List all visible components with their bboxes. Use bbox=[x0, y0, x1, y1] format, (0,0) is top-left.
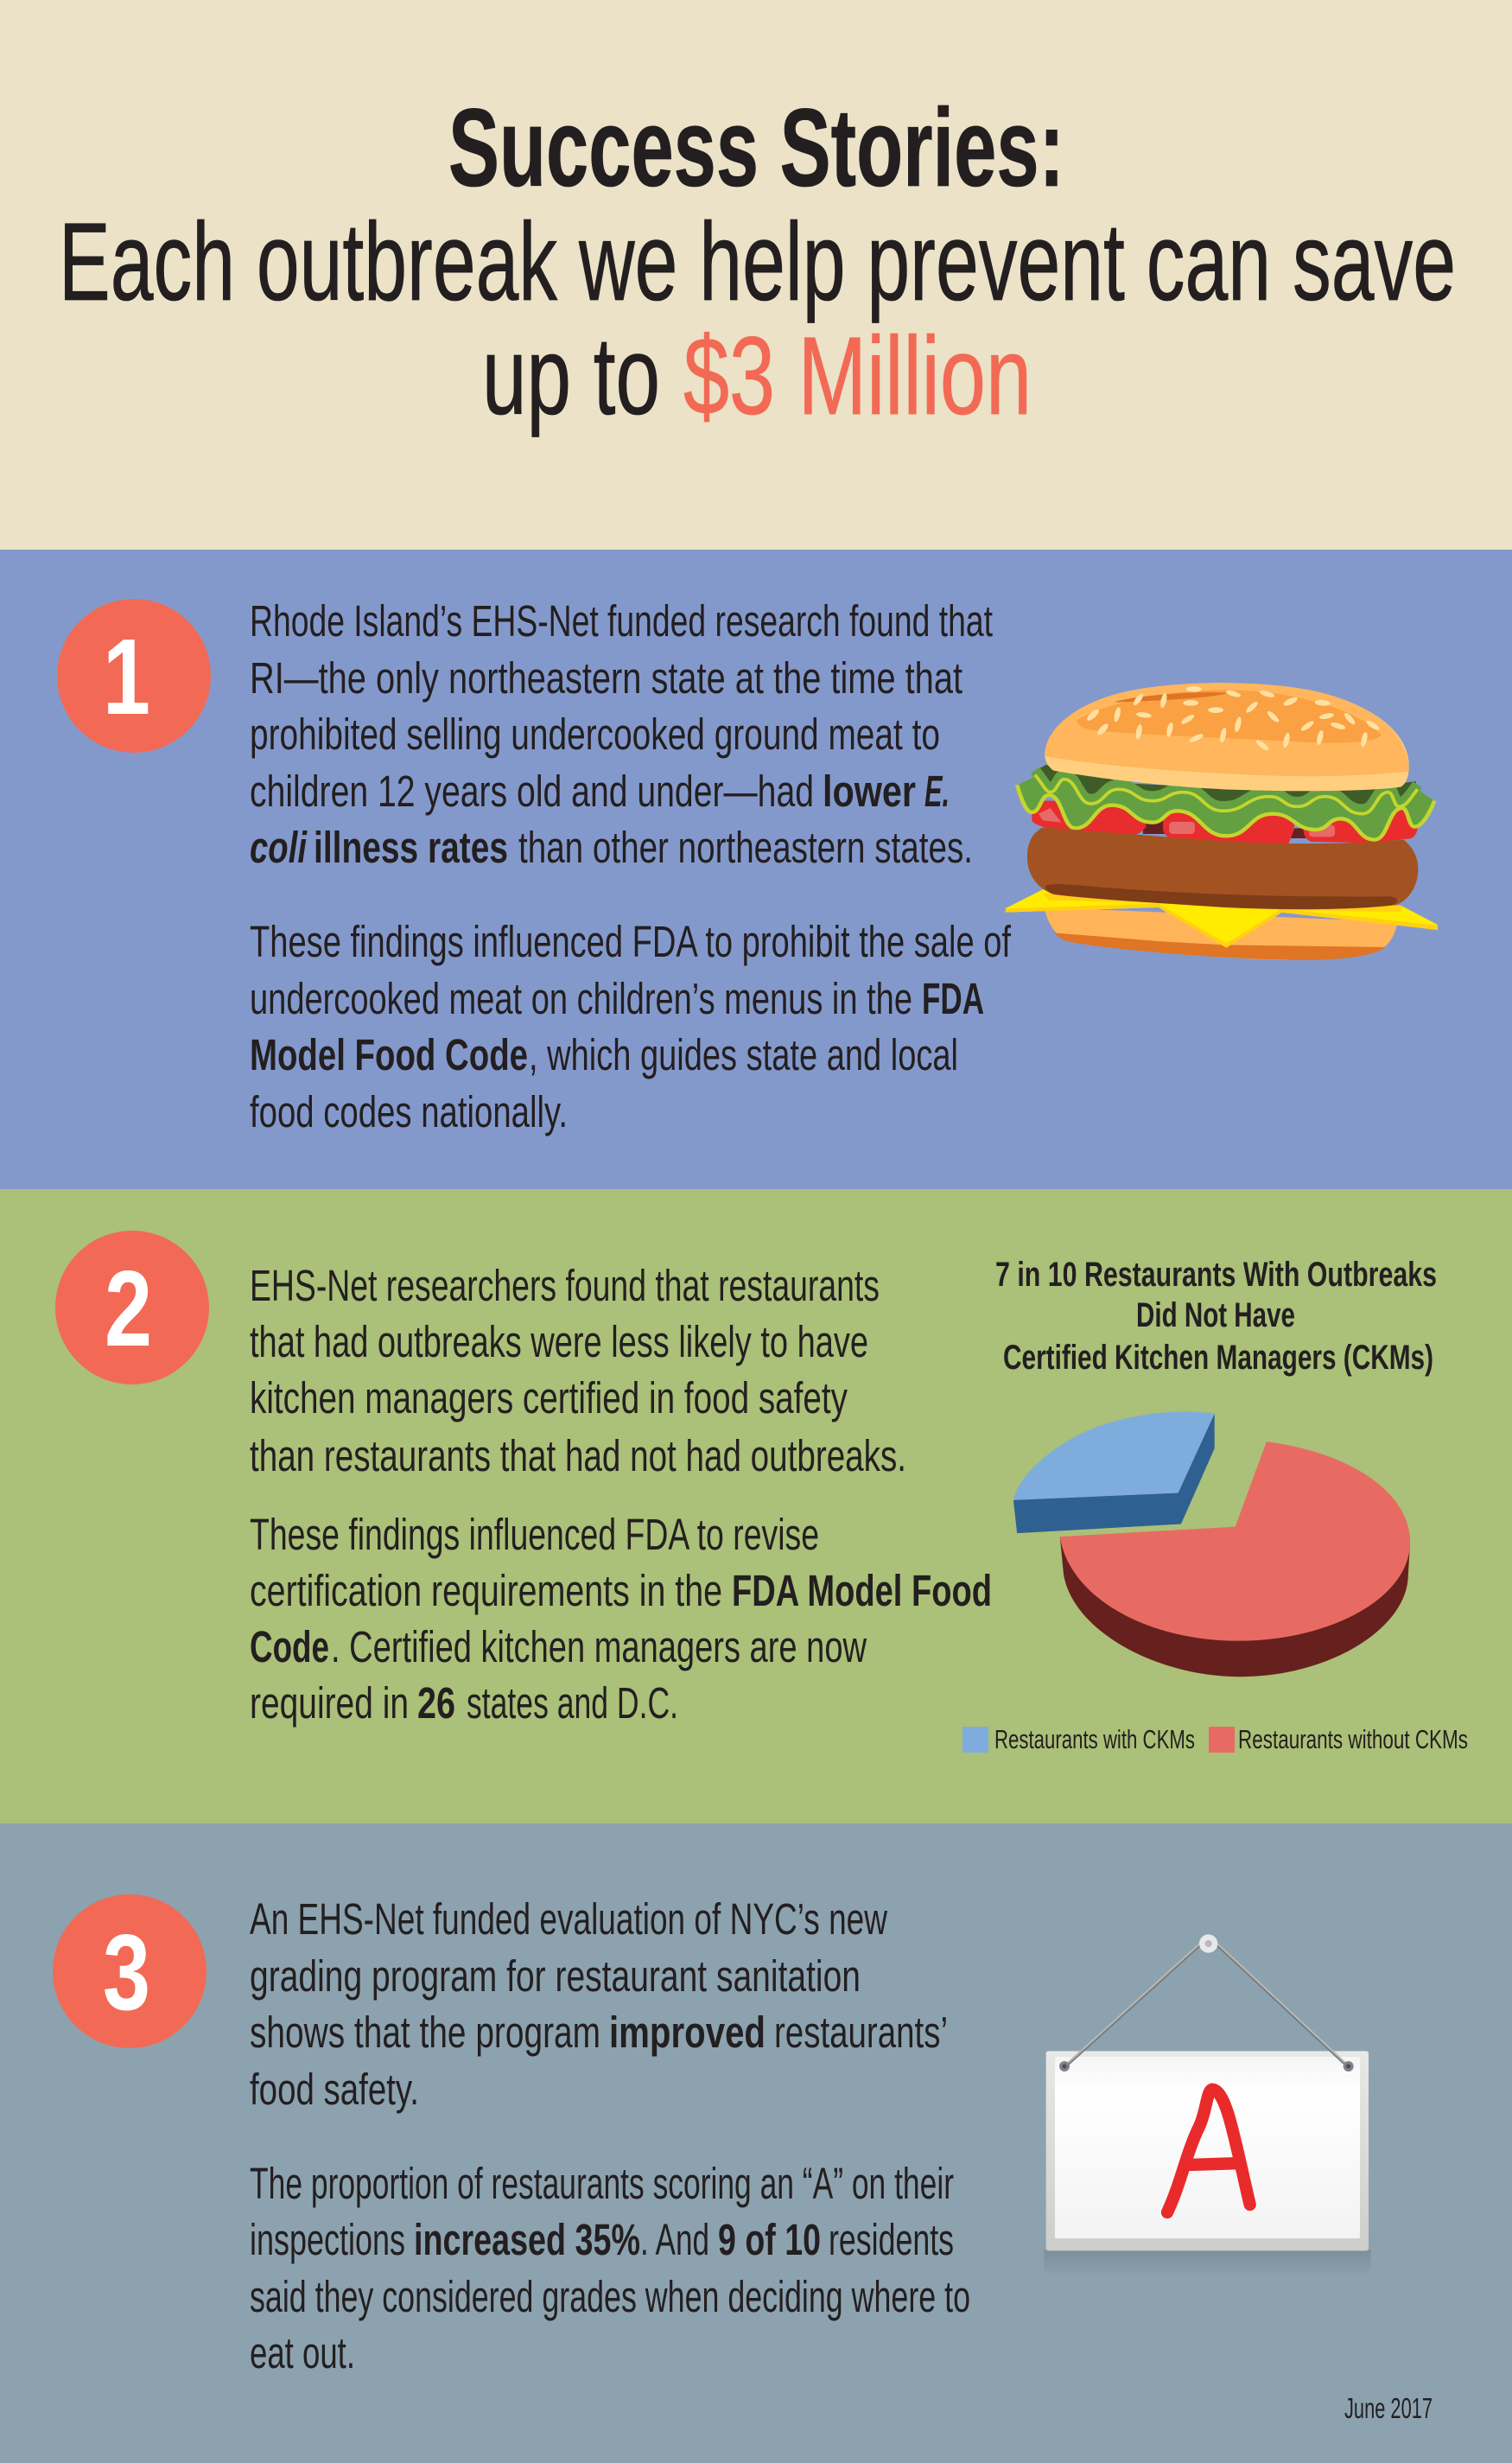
text block: story 3 second paragraph: eat out. bbox=[250, 2328, 355, 2377]
text block: story 2 second paragraph: 26 bbox=[417, 1678, 455, 1728]
text block: story 1 first paragraph: lower bbox=[823, 767, 916, 816]
title: $3 Million bbox=[683, 315, 1032, 438]
panel: header background bbox=[0, 0, 1512, 550]
date: June 2017 bbox=[1344, 2392, 1433, 2424]
patty bbox=[1027, 827, 1418, 909]
title: up to bbox=[482, 315, 660, 438]
text block: story 2 second paragraph: FDA Model Food bbox=[732, 1566, 992, 1615]
text block: story 3 second paragraph: 9 of 10 bbox=[718, 2215, 821, 2264]
text block: story 1 second paragraph: undercooked meat on children’s menus in the bbox=[250, 974, 912, 1023]
cheese bbox=[1006, 889, 1438, 948]
text block: story 1 second paragraph: food codes nationally. bbox=[250, 1087, 568, 1136]
text block: story 3 second paragraph bbox=[250, 2159, 970, 2377]
text block: story 1 first paragraph: than other northeastern states. bbox=[518, 823, 973, 872]
text block: story 3 second paragraph: inspections bbox=[250, 2215, 405, 2264]
text block: story 1 first paragraph: RI—the only northeastern state at the time that bbox=[250, 653, 962, 703]
dark lettuce back bbox=[1036, 765, 1416, 806]
text block: story 2 first paragraph: kitchen managers certified in food safety bbox=[250, 1373, 848, 1422]
text block: story 2 first paragraph: that had outbreaks were less likely to have bbox=[250, 1317, 868, 1366]
text block: story 3 first paragraph: shows that the program bbox=[250, 2008, 600, 2057]
text block: story 1 first paragraph: coli bbox=[250, 823, 308, 872]
text block: story 2 first paragraph: than restaurants that had not had outbreaks. bbox=[250, 1431, 906, 1480]
number badge 3: 3 bbox=[103, 1913, 150, 2033]
text block: story 1 first paragraph: E. bbox=[924, 767, 950, 816]
text block: story 2 second paragraph: required in bbox=[250, 1678, 409, 1728]
text block: story 1 first paragraph bbox=[250, 596, 993, 872]
text block: story 2 second paragraph: These findings influenced FDA to revise bbox=[250, 1510, 819, 1559]
chart legend bbox=[962, 1724, 1468, 1754]
text block: story 2 second paragraph bbox=[250, 1510, 992, 1728]
pie chart bbox=[1013, 1411, 1410, 1677]
top bun bbox=[1045, 683, 1409, 791]
text block: story 3 second paragraph: increased 35% bbox=[414, 2215, 640, 2264]
number badge 2: 2 bbox=[105, 1250, 152, 1369]
chart legend: Restaurants with CKMs bbox=[994, 1724, 1195, 1754]
text block: story 1 second paragraph: These findings influenced FDA to prohibit the sale of bbox=[250, 917, 1012, 966]
tomato filling bbox=[1143, 821, 1306, 838]
text block: story 1 second paragraph: , which guides state and local bbox=[529, 1030, 958, 1079]
number badge 1 bbox=[57, 599, 211, 753]
number badge 3 bbox=[53, 1894, 206, 2048]
icon: hamburger bbox=[1006, 683, 1438, 960]
number badge 1: 1 bbox=[103, 618, 150, 737]
letter A mark bbox=[1167, 2090, 1250, 2212]
slice: restaurants without CKMs bbox=[1060, 1442, 1410, 1677]
text block: story 1 second paragraph bbox=[250, 917, 1012, 1136]
text block: story 3 second paragraph: residents bbox=[829, 2215, 954, 2264]
text block: story 3 second paragraph: The proportion of restaurants scoring an “A” on their bbox=[250, 2159, 954, 2208]
lettuce bbox=[1035, 770, 1418, 809]
text block: story 2 first paragraph bbox=[250, 1261, 906, 1480]
panel: story 2 background bbox=[0, 1189, 1512, 1823]
text block: story 1 first paragraph: prohibited selling undercooked ground meat to bbox=[250, 710, 940, 759]
text block: story 1 first paragraph: Rhode Island’s EHS-Net funded research found that bbox=[250, 596, 993, 646]
chart title bbox=[995, 1256, 1437, 1377]
text block: story 2 second paragraph: certification requirements in the bbox=[250, 1566, 722, 1615]
title bbox=[59, 86, 1456, 438]
text block: story 2 first paragraph: EHS-Net researchers found that restaurants bbox=[250, 1261, 880, 1310]
chart title: Did Not Have bbox=[1136, 1296, 1295, 1334]
title: Success Stories: bbox=[448, 86, 1064, 210]
panel: story 3 background bbox=[0, 1823, 1512, 2463]
number badge 2 bbox=[55, 1231, 209, 1384]
text block: story 3 first paragraph: food safety. bbox=[250, 2065, 419, 2114]
text block: story 3 first paragraph: restaurants’ bbox=[774, 2008, 948, 2057]
text block: story 3 first paragraph: improved bbox=[609, 2008, 766, 2057]
panel: story 1 background bbox=[0, 550, 1512, 1189]
text block: story 3 first paragraph bbox=[250, 1894, 948, 2114]
icon: hanging grade sign bbox=[1044, 1934, 1371, 2277]
text block: story 1 first paragraph: illness rates bbox=[314, 823, 508, 872]
text block: story 2 second paragraph: . Certified kitchen managers are now bbox=[331, 1622, 867, 1671]
text block: story 3 second paragraph: said they considered grades when deciding where to bbox=[250, 2272, 970, 2321]
sesame seeds bbox=[1085, 686, 1381, 752]
text block: story 2 second paragraph: Code bbox=[250, 1622, 329, 1671]
text block: story 3 first paragraph: An EHS-Net funded evaluation of NYC’s new bbox=[250, 1894, 887, 1944]
text block: story 3 second paragraph: . And bbox=[640, 2215, 709, 2264]
text block: story 1 second paragraph: FDA bbox=[922, 974, 984, 1023]
slice: restaurants with CKMs bbox=[1013, 1411, 1215, 1533]
text block: story 2 second paragraph: states and D.C. bbox=[467, 1678, 678, 1728]
lower bun bbox=[1045, 907, 1397, 960]
text block: story 3 first paragraph: grading program for restaurant sanitation bbox=[250, 1951, 861, 2001]
text block: story 1 first paragraph: children 12 years old and under—had bbox=[250, 767, 814, 816]
text block: story 1 second paragraph: Model Food Code bbox=[250, 1030, 528, 1079]
